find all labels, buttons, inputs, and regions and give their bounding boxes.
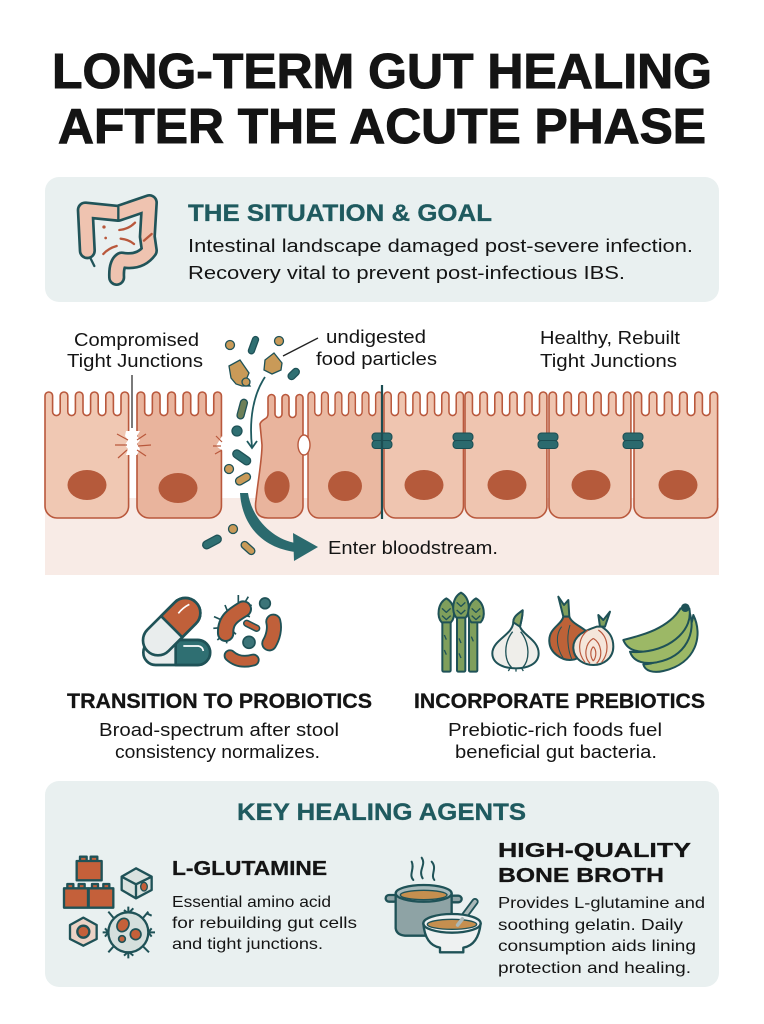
text: prebiotics description: beneficial gut bacteria. bbox=[455, 742, 657, 762]
panel: key healing agents bbox=[45, 781, 719, 987]
particles: undigested food and microbes bbox=[201, 336, 301, 556]
title: LONG-TERM GUT HEALING bbox=[52, 45, 712, 99]
label: enter bloodstream: Enter bloodstream. bbox=[328, 538, 498, 558]
label: compromised tight junctions bbox=[67, 330, 203, 428]
icon: colon bbox=[85, 203, 152, 277]
icon: asparagus bbox=[439, 593, 484, 672]
label: undigested food particles: undigested bbox=[326, 327, 426, 347]
label: healthy rebuilt tight junctions bbox=[540, 328, 680, 371]
heading: incorporate prebiotics: INCORPORATE PREBIOTICS bbox=[414, 690, 705, 713]
text: situation description: Recovery vital to prevent post-infectious IBS. bbox=[188, 263, 625, 283]
diagram: intestinal lining bbox=[45, 327, 719, 575]
text: l-glutamine: Essential amino acid bbox=[172, 894, 331, 911]
icon: asparagus, garlic, onions, bananas bbox=[439, 593, 698, 672]
heading: key healing agents: KEY HEALING AGENTS bbox=[237, 799, 526, 826]
text: situation description: Intestinal landscape damaged post-severe infection. bbox=[188, 236, 693, 256]
panel: incorporate prebiotics bbox=[414, 593, 705, 762]
text: high-quality bone broth: BONE BROTH bbox=[498, 865, 664, 887]
text: probiotics description: consistency normalizes. bbox=[115, 742, 320, 762]
arrow: enter bloodstream bbox=[240, 493, 318, 561]
text: high-quality bone broth bbox=[498, 840, 705, 977]
text: probiotics description: Broad-spectrum after stool bbox=[99, 720, 339, 740]
text: high-quality bone broth: consumption aids lining bbox=[498, 938, 696, 955]
title: AFTER THE ACUTE PHASE bbox=[58, 100, 706, 154]
icon: bananas bbox=[623, 604, 698, 672]
text: l-glutamine: L-GLUTAMINE bbox=[172, 858, 327, 880]
icon: onions bbox=[549, 597, 613, 665]
panel: the situation and goal bbox=[45, 177, 719, 302]
label: undigested food particles: food particles bbox=[316, 349, 437, 369]
text: l-glutamine: and tight junctions. bbox=[172, 936, 323, 953]
label: healthy rebuilt tight junctions: Healthy, Rebuilt bbox=[540, 328, 680, 348]
label: healthy rebuilt tight junctions: Tight Junctions bbox=[540, 351, 677, 371]
text: prebiotics description: Prebiotic-rich foods fuel bbox=[448, 720, 662, 740]
label: compromised tight junctions: Compromised bbox=[74, 330, 199, 350]
text: situation description bbox=[188, 236, 693, 283]
text: high-quality bone broth: HIGH-QUALITY bbox=[498, 840, 692, 862]
title bbox=[52, 45, 712, 154]
cells: healthy lining bbox=[372, 385, 718, 519]
arrow: particles passing through the gap bbox=[247, 377, 265, 448]
icon: pot and bowl of broth bbox=[386, 858, 481, 952]
text: probiotics description bbox=[99, 720, 339, 762]
cells: damaged lining bbox=[45, 392, 382, 518]
text: high-quality bone broth: Provides L-glutamine and bbox=[498, 895, 705, 912]
text: high-quality bone broth: protection and healing. bbox=[498, 960, 691, 977]
text: l-glutamine: for rebuilding gut cells bbox=[172, 915, 357, 932]
label: undigested food particles bbox=[283, 327, 437, 369]
panel: transition to probiotics bbox=[67, 592, 372, 762]
label: compromised tight junctions: Tight Junctions bbox=[67, 351, 203, 371]
text: high-quality bone broth: soothing gelatin. Daily bbox=[498, 917, 683, 934]
heading: the situation and goal: THE SITUATION & GOAL bbox=[188, 200, 492, 227]
icon: garlic bbox=[492, 610, 539, 672]
heading: transition to probiotics: TRANSITION TO PROBIOTICS bbox=[67, 690, 372, 713]
icon: amino acid blocks and cell bbox=[64, 857, 155, 958]
text: prebiotics description bbox=[448, 720, 662, 762]
text: l-glutamine bbox=[172, 858, 357, 953]
icon: capsules and bacteria bbox=[137, 592, 274, 665]
